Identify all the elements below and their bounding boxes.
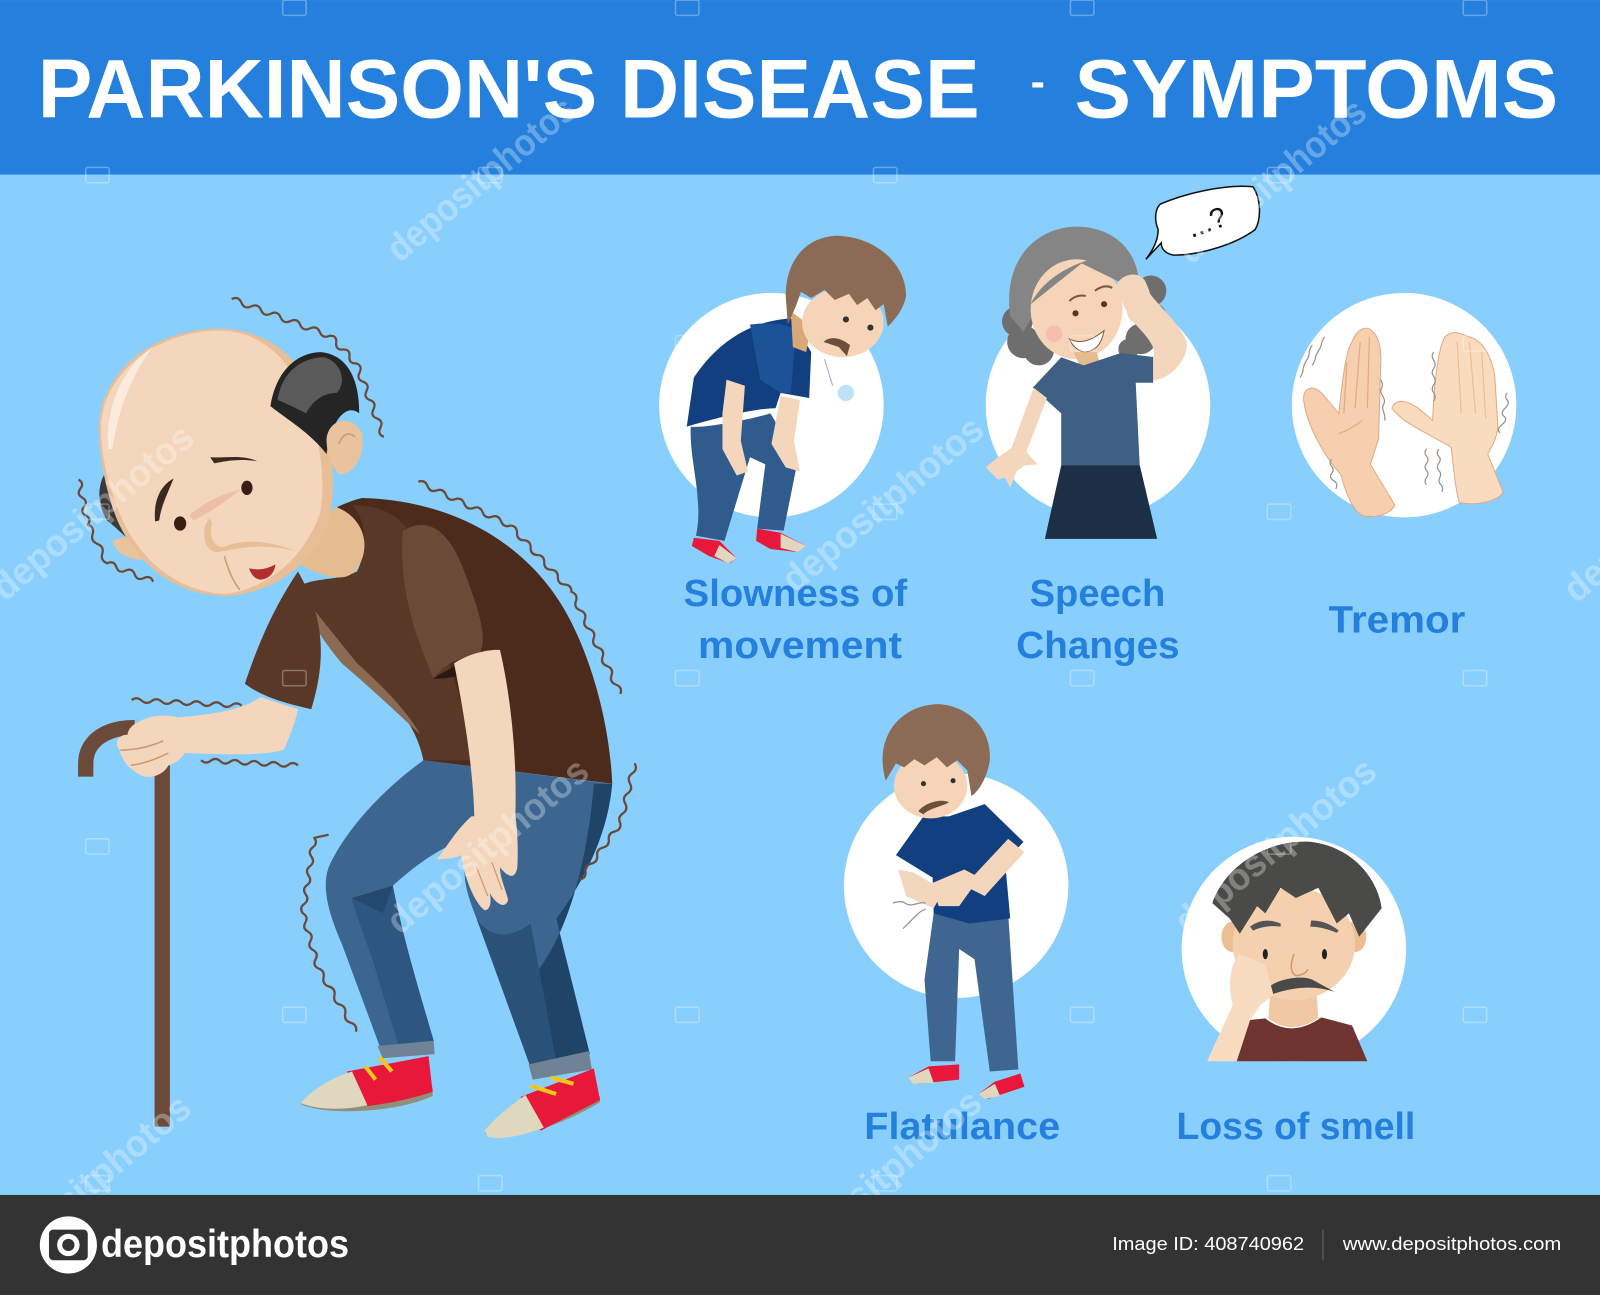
white circle backgrounds [659,293,1516,1061]
neck [1268,990,1318,1027]
hair top [1009,227,1139,332]
ears [1221,921,1366,952]
shirt sleeve far [245,571,321,709]
walking cane [86,728,162,1127]
title: SYMPTOMS [1074,41,1558,135]
label: flatulance: Flatulance [864,1105,1060,1147]
hair [1212,842,1382,937]
label: tremor: Tremor [1329,599,1466,641]
shirt sleeve near [402,525,483,679]
near arm and hand [437,650,518,910]
footer bar [0,1195,1600,1295]
watermarks: depositphotos [378,749,597,942]
illustration: old man with cane [79,298,636,1138]
brown shirt [245,498,612,784]
watermarks: depositphotos [771,1081,990,1274]
tremor lines [79,298,636,1032]
label: slowness of movement [684,572,908,666]
right shoe [485,1068,600,1138]
neck [791,311,811,352]
watermarks: depositphotos [378,88,583,269]
hand and arm [1207,954,1273,1061]
facial features [1250,920,1339,995]
shirt [687,318,811,427]
speech bubble: ...? [1183,201,1231,245]
head [786,236,906,357]
face [155,479,173,521]
title: PARKINSON'S DISEASE [38,41,980,135]
illustration: tremor hands [1300,328,1508,516]
rear arm and hand [117,697,298,777]
head [99,329,363,596]
left shoe [301,1056,433,1111]
illustration: flatulence figure [883,704,1024,1099]
label: slowness of movement: movement [698,624,902,666]
ear [327,421,363,475]
symptom labels [684,572,1466,1147]
shirt [1237,1017,1367,1061]
header banner: - [1031,58,1045,106]
left hand [1304,328,1395,516]
shoes [692,529,806,563]
neck [1073,352,1100,369]
label: speech changes: Changes [1016,624,1180,666]
shirt [896,804,1023,924]
right hand [1392,333,1503,504]
jeans [326,760,612,1067]
hair curls [1002,276,1166,365]
watermarks: depositphotos [773,407,992,600]
jeans [691,413,796,541]
raised arm and hand [1115,275,1187,381]
lower arm and hand [986,388,1047,488]
watermarks: depositphotos [1166,749,1384,942]
logo icon: camera [40,1216,97,1274]
face [1031,259,1122,359]
hair back of head [99,471,140,546]
illustration: slowness of movement figure [687,236,906,563]
label: slowness of movement: Slowness of [684,572,908,614]
trouser cuffs [378,1041,592,1080]
neck [298,507,364,577]
shoes [908,1064,1024,1099]
logo wordmark: depositphotos [101,1223,349,1266]
header banner [0,0,1600,175]
illustration: loss of smell figure [1207,842,1382,1061]
speech bubble [1146,186,1259,259]
label: speech changes [1016,572,1180,666]
breath puff [824,359,854,401]
gas lines [893,902,926,929]
head [883,704,990,818]
illustration: speech changes figure [986,186,1259,539]
watermarks: depositphotos [1169,90,1374,271]
arms [722,380,800,476]
label: speech changes: Speech [1030,572,1165,614]
face [1233,888,1355,1000]
hair patch [270,352,359,454]
jeans [924,913,1018,1071]
shirt [1033,353,1155,467]
label: loss of smell: Loss of smell [1177,1105,1415,1147]
tremor marks [1300,337,1508,492]
website url: www.depositphotos.com [1342,1233,1561,1254]
skirt [1045,465,1157,539]
arms [898,839,1024,908]
image id: Image ID: 408740962 [1112,1233,1304,1254]
